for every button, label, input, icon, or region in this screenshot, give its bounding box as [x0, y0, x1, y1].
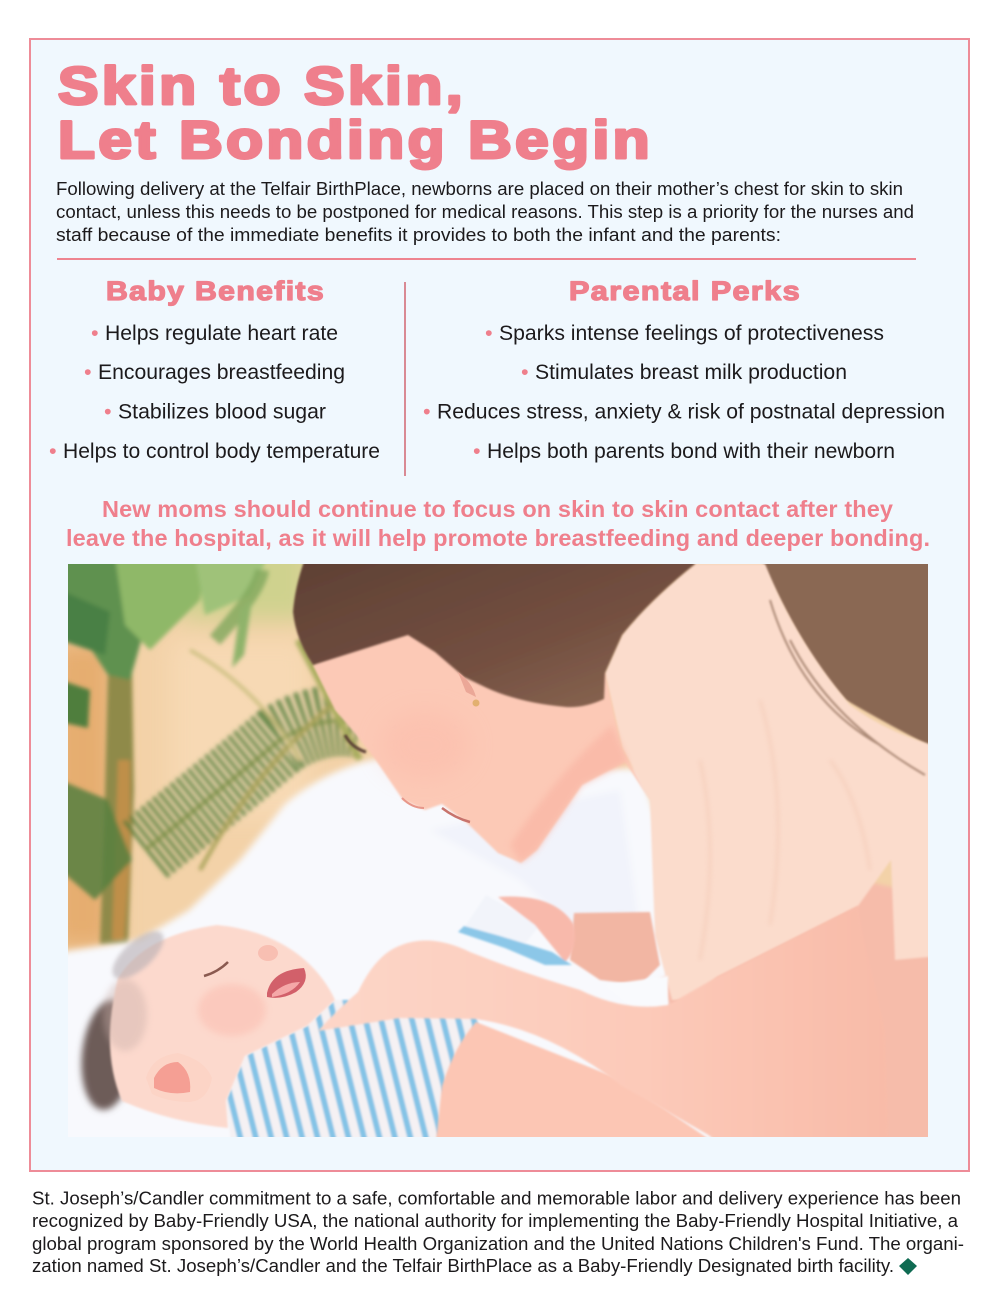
intro text block: staff because of the immediate benefits it provides to both the infant and the parents:	[56, 224, 781, 245]
list: baby benefits items: •	[104, 398, 112, 424]
list: parental perks items: •	[485, 320, 493, 345]
baby's raised sleeve and hand	[458, 895, 575, 965]
mother's ear and earring	[458, 672, 480, 706]
baby's ear	[146, 1053, 212, 1102]
list: parental perks items: •	[473, 438, 481, 463]
shirt folds and hair strands	[768, 599, 926, 776]
title: Skin to Skin,	[58, 57, 466, 116]
title	[58, 57, 653, 170]
title: Let Bonding Begin	[58, 111, 653, 170]
list: baby benefits items: Encourages breastfeeding	[98, 359, 345, 384]
callout: leave the hospital, as it will help promote breastfeeding and deeper bonding.	[66, 525, 930, 551]
baby's onesie	[226, 1000, 478, 1150]
list: parental perks items: Helps both parents bond with their newborn	[487, 438, 895, 463]
mother's back hair	[762, 564, 928, 745]
intro text block	[56, 178, 914, 245]
mother's hair	[293, 556, 695, 707]
white patch under arm	[617, 976, 670, 1005]
baby's leg	[435, 1021, 708, 1137]
list: baby benefits items: •	[91, 320, 99, 345]
list: parental perks items: Stimulates breast milk production	[535, 359, 847, 384]
list: baby benefits items: •	[49, 438, 57, 463]
heading: baby benefits: Baby Benefits	[106, 276, 325, 306]
heading: parental perks: Parental Perks	[569, 276, 801, 306]
photo: mother and smiling baby illustration	[68, 564, 928, 1137]
footer text: global program sponsored by the World Health Organization and the United Nations Children's Fund. The organi-	[32, 1233, 964, 1254]
plant and warm wall	[50, 540, 360, 950]
list: baby benefits items	[49, 320, 380, 463]
footer text: zation named St. Joseph’s/Candler and the Telfair BirthPlace as a Baby-Friendly Designated birth facility.	[32, 1255, 894, 1276]
mother's neck and face	[313, 630, 650, 863]
footer text: recognized by Baby-Friendly USA, the national authority for implementing the Baby-Friendly Hospital Initiative, a	[32, 1210, 959, 1231]
callout	[66, 496, 930, 551]
list: parental perks items: •	[423, 398, 431, 424]
mother's body base	[662, 883, 928, 1137]
list: parental perks items: •	[521, 359, 529, 384]
list: parental perks items	[423, 320, 945, 463]
list: parental perks items: Sparks intense feelings of protectiveness	[499, 320, 884, 345]
baby's closed eye	[204, 962, 228, 976]
footer text	[32, 1188, 964, 1276]
intro text block: contact, unless this needs to be postponed for medical reasons. This step is a priority for the nurses and	[56, 201, 914, 222]
mother's second hand	[570, 912, 660, 985]
list: parental perks items: Reduces stress, anxiety & risk of postnatal depression	[437, 398, 945, 424]
baby's head	[76, 923, 335, 1128]
mother's arm and hand	[318, 908, 855, 1137]
baby's mouth	[267, 968, 306, 998]
callout: New moms should continue to focus on skin to skin contact after they	[102, 496, 893, 522]
list: baby benefits items: Stabilizes blood sugar	[118, 398, 326, 424]
footer text: St. Joseph’s/Candler commitment to a safe, comfortable and memorable labor and delivery experience has been	[32, 1188, 961, 1208]
bed and pillow	[68, 756, 713, 1137]
list: baby benefits items: Helps to control body temperature	[63, 438, 380, 463]
panel: baby benefits	[49, 276, 380, 463]
panel: parental perks	[423, 276, 945, 463]
icon: green end diamond	[899, 1258, 917, 1275]
intro text block: Following delivery at the Telfair BirthPlace, newborns are placed on their mother’s chest for skin to skin	[56, 178, 903, 199]
baby's nose	[258, 945, 278, 961]
mother's shirt	[605, 564, 950, 1000]
list: baby benefits items: •	[84, 359, 92, 384]
list: baby benefits items: Helps regulate heart rate	[105, 320, 338, 345]
